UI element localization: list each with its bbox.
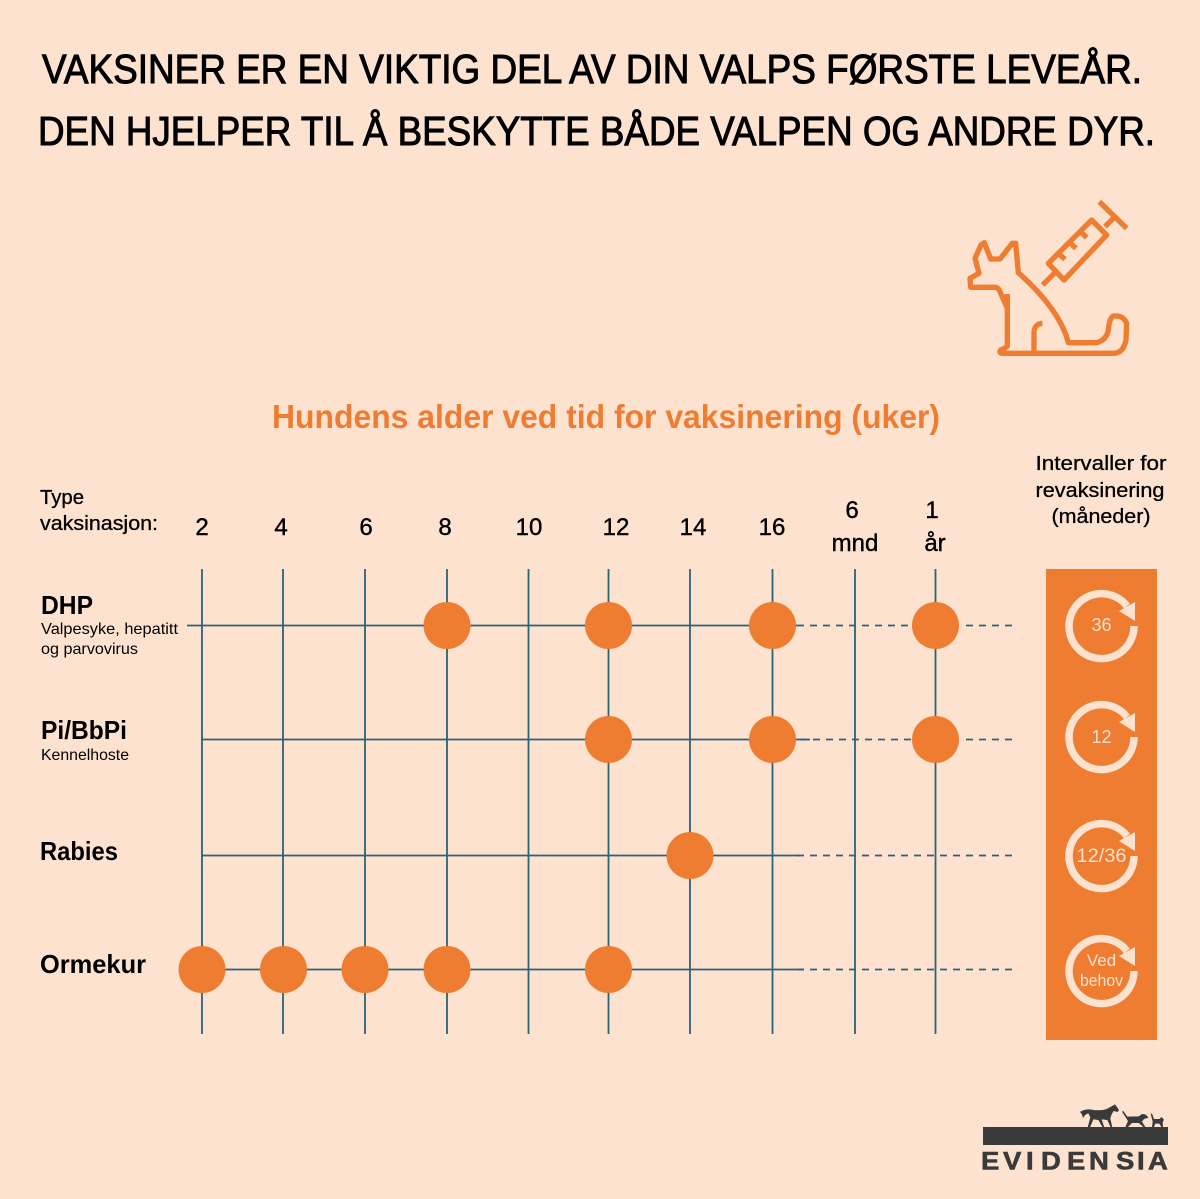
row label: Pi/BbPi: Pi/BbPi (41, 715, 127, 745)
doses: Pi/BbPi (585, 716, 959, 763)
age axis labels (195, 497, 946, 557)
interval: 12 months (1069, 705, 1135, 770)
row label: DHP: og parvovirus (41, 641, 138, 658)
age axis labels: år (924, 530, 946, 557)
age axis labels: 2 (195, 514, 209, 541)
age axis labels: 16 (759, 514, 785, 541)
icon: horse (1080, 1104, 1119, 1127)
interval: 12/36 months (1069, 824, 1135, 889)
column heading: vaccination type: vaksinasjon: (40, 513, 158, 535)
icon: dog with syringe (970, 202, 1127, 353)
age axis labels: mnd (832, 530, 878, 557)
interval: 12 months: 12 (1091, 727, 1112, 747)
panel: revaccination intervals (1046, 569, 1157, 1040)
age axis labels: 6 (359, 514, 373, 541)
row label: DHP: Valpesyke, hepatitt (41, 621, 179, 638)
heading: revaccination intervals: Intervaller for (1036, 453, 1167, 475)
icon: cat (1151, 1114, 1164, 1127)
doses: DHP (424, 602, 959, 649)
interval: 12/36 months: 12/36 (1076, 846, 1126, 867)
row label: Ormekur: Ormekur (40, 949, 146, 979)
doses: Rabies (666, 832, 714, 879)
doses: Ormekur (178, 946, 632, 993)
age axis labels: 6 (845, 497, 859, 524)
interval: as needed (1069, 939, 1135, 1004)
logo: Evidensia: EVIDENSIA (981, 1147, 1168, 1175)
age axis labels: 8 (438, 514, 452, 541)
interval: as needed: behov (1080, 971, 1123, 990)
interval: 36 months (1069, 594, 1135, 659)
row label: Pi/BbPi (41, 715, 129, 764)
age axis labels: 12 (603, 514, 629, 541)
title (38, 46, 1155, 154)
schedule grid (187, 569, 1012, 1034)
heading: revaccination intervals (1036, 453, 1167, 528)
column heading: vaccination type: Type (40, 487, 84, 509)
column heading: vaccination type (40, 487, 158, 535)
icon: dog (1122, 1111, 1149, 1127)
row label: Rabies: Rabies (40, 836, 118, 866)
chart heading: Hundens alder ved tid for vaksinering (uker) (272, 398, 940, 435)
row label: DHP: DHP (41, 590, 93, 620)
row label: Pi/BbPi: Kennelhoste (41, 747, 129, 764)
age axis labels: 4 (274, 514, 288, 541)
logo: Evidensia (981, 1104, 1168, 1175)
age axis labels: 1 (925, 497, 939, 524)
heading: revaccination intervals: (måneder) (1052, 506, 1150, 528)
interval: 36 months: 36 (1091, 615, 1112, 635)
age axis labels: 10 (516, 514, 542, 541)
row label: DHP (41, 590, 179, 658)
age axis labels: 14 (680, 514, 706, 541)
heading: revaccination intervals: revaksinering (1036, 480, 1164, 502)
interval: as needed: Ved (1087, 951, 1116, 970)
